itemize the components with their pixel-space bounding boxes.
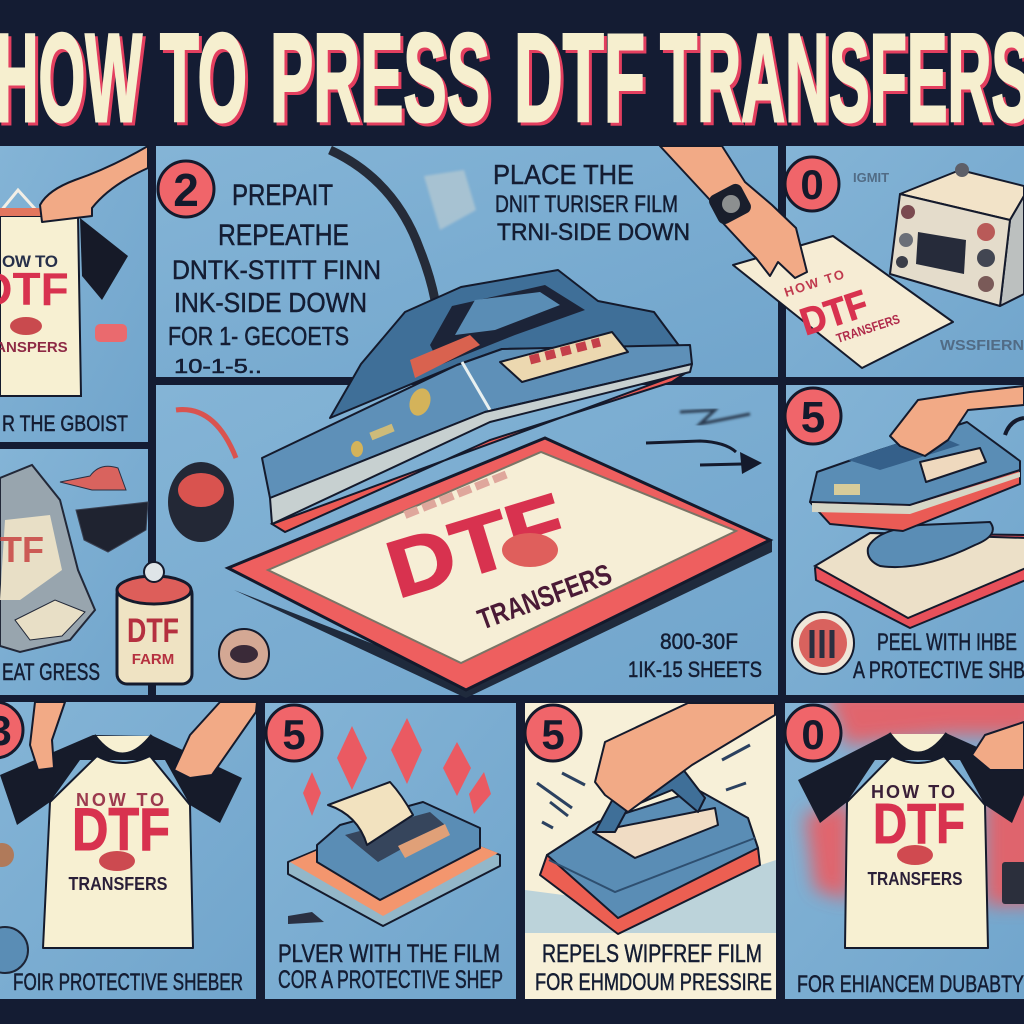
- step badge: [0, 702, 23, 758]
- icon: dark box: [1002, 862, 1024, 904]
- icon: t-shirt: TRANSFERS: [68, 874, 168, 894]
- title: [0, 9, 1024, 151]
- panel: bottom 4: [785, 690, 1024, 999]
- caption: [853, 629, 1024, 684]
- icon: hand: [890, 386, 1024, 456]
- panel: top right: [785, 146, 1024, 377]
- icon: crumpled shirt: [0, 465, 95, 652]
- red underside: [272, 370, 690, 532]
- step badge: 5: [541, 711, 565, 758]
- handle: [430, 285, 585, 365]
- instruction text right: DNIT TURISER FILM: [495, 191, 678, 218]
- caption: FOIR PROTECTIVE SHEBER: [13, 969, 243, 996]
- instruction text right: PLACE THE: [493, 159, 634, 190]
- step badge 2: 2: [173, 164, 199, 216]
- instruction text right: TRNI-SIDE DOWN: [497, 219, 690, 246]
- front face: [262, 345, 692, 498]
- icon: transfer film sheet: DTF: [795, 283, 873, 344]
- icon: sparkles: [303, 718, 491, 816]
- icon: side objects: [0, 843, 14, 867]
- icon: finished t-shirt: HOW TO: [871, 782, 955, 802]
- icon: t-shirt: DTF: [72, 796, 170, 863]
- icon: small gauge: [219, 629, 269, 679]
- icon: crumpled shirt: TF: [0, 529, 44, 570]
- icon: shirt: [0, 208, 92, 396]
- title: TO: [160, 9, 247, 148]
- icon: finished t-shirt: TRANSFERS: [868, 869, 962, 889]
- icon: small press head: [810, 418, 1024, 531]
- icon: hanger: [0, 190, 36, 212]
- icon: platen with transfer: DTF: [377, 477, 575, 615]
- instruction text left: DNTK-STITT FINN: [172, 255, 381, 285]
- step badge: 0: [800, 161, 824, 208]
- icon: DTF can: [117, 562, 192, 684]
- caption: REPELS WIPFREF FILM: [542, 940, 762, 968]
- icon: t-shirt: [0, 735, 242, 948]
- panel: top right: WSSFIERN: [940, 337, 1024, 354]
- icon: red arc: [176, 410, 236, 458]
- icon: goggles: [76, 502, 148, 552]
- step badge: [266, 705, 322, 761]
- title: HOW: [0, 9, 142, 148]
- title: PRESS: [273, 12, 493, 151]
- cable: [330, 150, 435, 300]
- panel: top right: IGMIT: [853, 170, 889, 185]
- icon: finished t-shirt: [798, 734, 1024, 948]
- icon: platen with transfer: [228, 438, 772, 698]
- icon: shirt: OW TO: [2, 252, 58, 271]
- icon: hand with watch: [660, 146, 807, 278]
- panel: bottom 2: [265, 703, 516, 999]
- icon: hand: [595, 703, 775, 812]
- caption: COR A PROTECTIVE SHEP: [278, 966, 503, 994]
- step badge: [785, 388, 841, 444]
- instruction text left: INK-SIDE DOWN: [174, 287, 367, 318]
- icon: heat press: [262, 150, 692, 532]
- icon: hand: [972, 722, 1024, 770]
- step badge: 0: [801, 711, 825, 758]
- caption: PLVER WITH THE FILM: [278, 940, 500, 968]
- instruction text left: FOR 1- GECOETS: [168, 321, 349, 351]
- squiggle: [680, 410, 750, 424]
- icon: round seal: [792, 612, 854, 674]
- icon: t-shirt: NOW TO: [76, 790, 164, 810]
- step badge: 5: [282, 711, 306, 758]
- instruction text right: [493, 159, 690, 246]
- instruction text left: [168, 179, 381, 378]
- caption: [535, 940, 772, 996]
- caption: FOR EHMDOUM PRESSIRE: [535, 969, 772, 996]
- icon: hand holding shirt: [40, 146, 148, 222]
- icon: DTF can: FARM: [132, 651, 174, 668]
- title: DTF: [517, 12, 648, 151]
- title: PRESS: [270, 9, 490, 148]
- panel: right middle: [785, 385, 1024, 695]
- panel: top centre: [156, 146, 778, 378]
- panel: lower left: [0, 449, 148, 695]
- step badge: [785, 705, 841, 761]
- top surface: [330, 270, 680, 418]
- panel: central press background: [156, 385, 778, 695]
- panel: lower left: EAT GRESS: [2, 659, 100, 686]
- label: [500, 332, 628, 382]
- arrows: [646, 441, 762, 474]
- title: TO: [163, 12, 250, 151]
- step badge: [525, 705, 581, 761]
- bottom strip: [270, 364, 692, 524]
- step badge: [785, 157, 839, 211]
- icon: transfer film sheet: HOW TO: [782, 266, 846, 300]
- step badge: 5: [801, 393, 825, 442]
- step badge 2: [158, 161, 214, 217]
- icon: DTF can: DTF: [127, 612, 179, 650]
- caption: [278, 940, 503, 994]
- icon: right hand: [174, 702, 257, 778]
- caption: R THE GBOIST: [2, 411, 128, 436]
- icon: left hand: [30, 702, 65, 770]
- instruction text left: PREPAIT: [232, 179, 333, 212]
- icon: black sleeve: [80, 218, 128, 300]
- title: DTF: [514, 9, 645, 148]
- icon: small press base: [815, 522, 1024, 628]
- icon: transfer film sheet: [733, 236, 953, 368]
- speed marks: [537, 773, 585, 828]
- icon: finished t-shirt: DTF: [873, 792, 965, 856]
- panel: bottom 1: [0, 702, 257, 999]
- instruction text left: 10-1-5..: [174, 356, 262, 378]
- title: HOW: [0, 12, 145, 151]
- icon: press with film: [288, 782, 500, 926]
- doodle: [424, 170, 476, 230]
- icon: transfer film sheet: TRANSFERS: [834, 311, 902, 346]
- temperature caption: 1IK-15 SHEETS: [628, 657, 762, 682]
- panel: bottom 3: [525, 703, 776, 999]
- panel: shirt on hanger: [0, 146, 148, 442]
- icon: iron base: [540, 768, 760, 934]
- icon: control box: [890, 163, 1024, 306]
- tag: [95, 324, 127, 342]
- icon: gauge helmet: [168, 462, 234, 542]
- icon: red tool: [60, 466, 126, 490]
- instruction text left: REPEATHE: [218, 219, 349, 252]
- temperature caption: 800-30F: [660, 629, 738, 654]
- temperature caption: [628, 629, 762, 682]
- icon: platen with transfer: TRANSFERS: [474, 559, 616, 637]
